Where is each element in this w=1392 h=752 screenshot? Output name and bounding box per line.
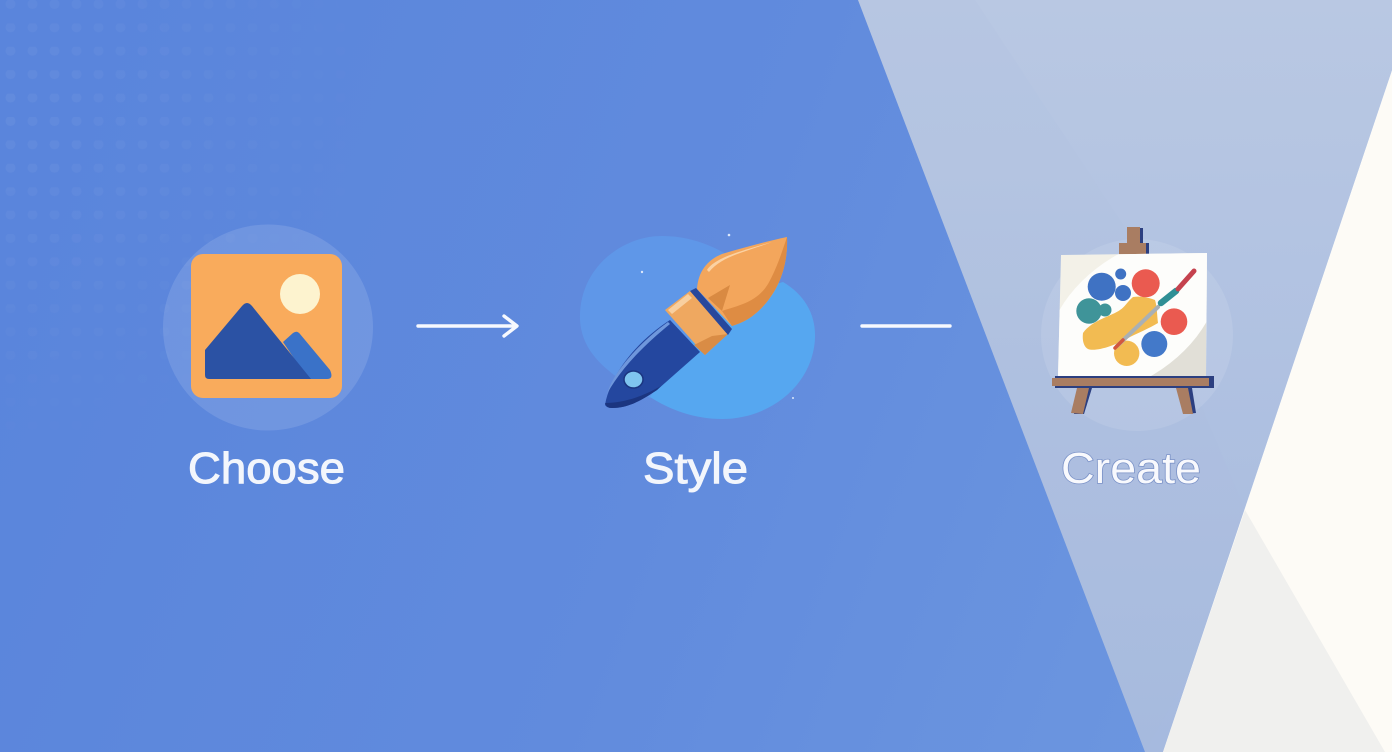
- blue blob behind brush: [580, 236, 815, 419]
- ferrule: [665, 291, 730, 355]
- small brush on canvas: [1115, 271, 1194, 348]
- canvas: [1058, 253, 1207, 376]
- step 1: choose: [163, 224, 373, 493]
- step 2: style: [580, 234, 815, 493]
- easel shelf: [1052, 376, 1214, 388]
- connector line: style to create: [862, 324, 950, 328]
- handle hole: [624, 371, 643, 388]
- icon: paintbrush: [605, 237, 787, 408]
- icon: image picture: [191, 254, 342, 398]
- bristles: [697, 237, 787, 326]
- halo circle: [163, 224, 373, 430]
- background: [782, 270, 1145, 752]
- light grey-blue diagonal panel: [858, 0, 1392, 752]
- sparkles: [641, 234, 794, 399]
- label: Style: Style: [643, 444, 748, 493]
- cream diagonal panel: [1163, 70, 1392, 752]
- arrow: choose to style: [418, 316, 517, 336]
- step 3: create: [1052, 227, 1214, 484]
- icon: easel with canvas: [1052, 227, 1214, 414]
- easel top: [1119, 227, 1149, 255]
- easel legs: [1071, 388, 1196, 414]
- label: Create: Create: [1061, 444, 1201, 493]
- paint blobs: [1076, 268, 1187, 366]
- label: Choose: Choose: [188, 444, 345, 493]
- halo circle: [1041, 239, 1233, 431]
- handle: [605, 320, 700, 408]
